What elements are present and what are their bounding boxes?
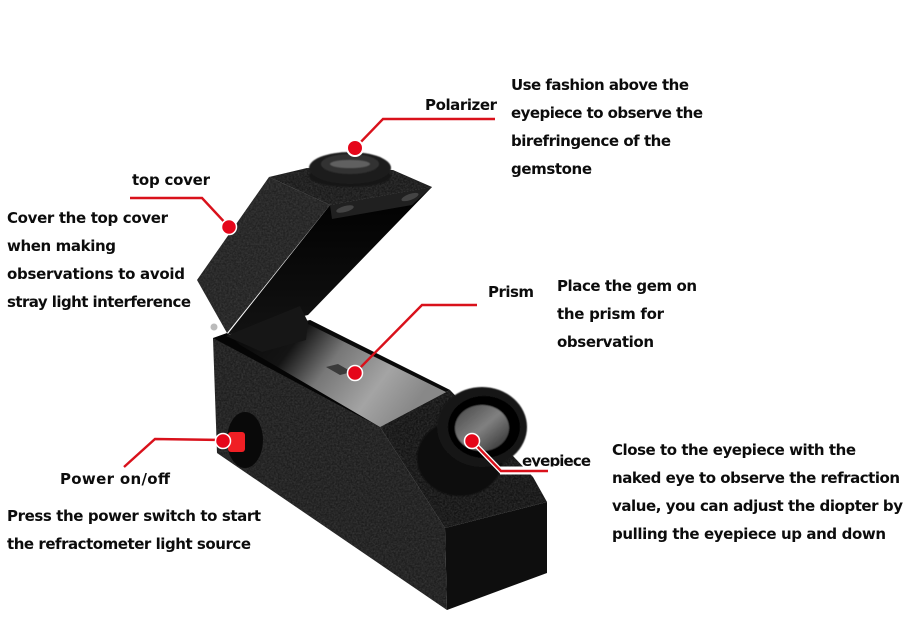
polarizer ring [309,152,391,187]
label: eyepiece: eyepiece [522,452,591,470]
label: eyepiece [500,452,600,474]
text: prism description: observation [557,333,654,351]
label: power on/off: Power on/off [60,470,171,488]
label: top cover: top cover [132,171,211,189]
text: polarizer description: eyepiece to observe the [511,104,703,122]
text: power description: the refractometer light source [7,535,251,553]
callout line: power [124,434,230,467]
top cover [197,168,432,352]
text: top cover description: observations to avoid [7,265,185,283]
text: eyepiece description: Close to the eyepiece with the [612,441,856,459]
callout line: polarizer [347,119,495,156]
callout line: top cover [130,198,236,234]
text: prism description [557,277,697,351]
text: prism description: the prism for [557,305,665,323]
text: polarizer description: birefringence of the [511,132,671,150]
text: power description [7,507,261,553]
refractometer device [197,152,547,610]
text: top cover description: when making [7,237,116,255]
callout line: eyepiece [464,434,548,471]
text: top cover description: Cover the top cover [7,209,169,227]
text: polarizer description: gemstone [511,160,592,178]
base body [213,338,547,610]
text: top cover description: stray light interference [7,293,191,311]
callout line: prism [348,305,477,380]
text: polarizer description [511,76,703,178]
text: eyepiece description [612,441,903,543]
label: prism: Prism [488,283,534,301]
top plate with prism [213,320,450,430]
text: polarizer description: Use fashion above the [511,76,689,94]
power knob [227,412,263,468]
eyepiece barrel [417,387,527,496]
text: eyepiece description: value, you can adjust the diopter by [612,497,903,515]
text: eyepiece description: pulling the eyepiece up and down [612,525,886,543]
text: eyepiece description: naked eye to observe the refraction [612,469,900,487]
text: power description: Press the power switch to start [7,507,261,525]
text: prism description: Place the gem on [557,277,697,295]
text: top cover description [7,209,191,311]
label: polarizer: Polarizer [425,96,498,114]
